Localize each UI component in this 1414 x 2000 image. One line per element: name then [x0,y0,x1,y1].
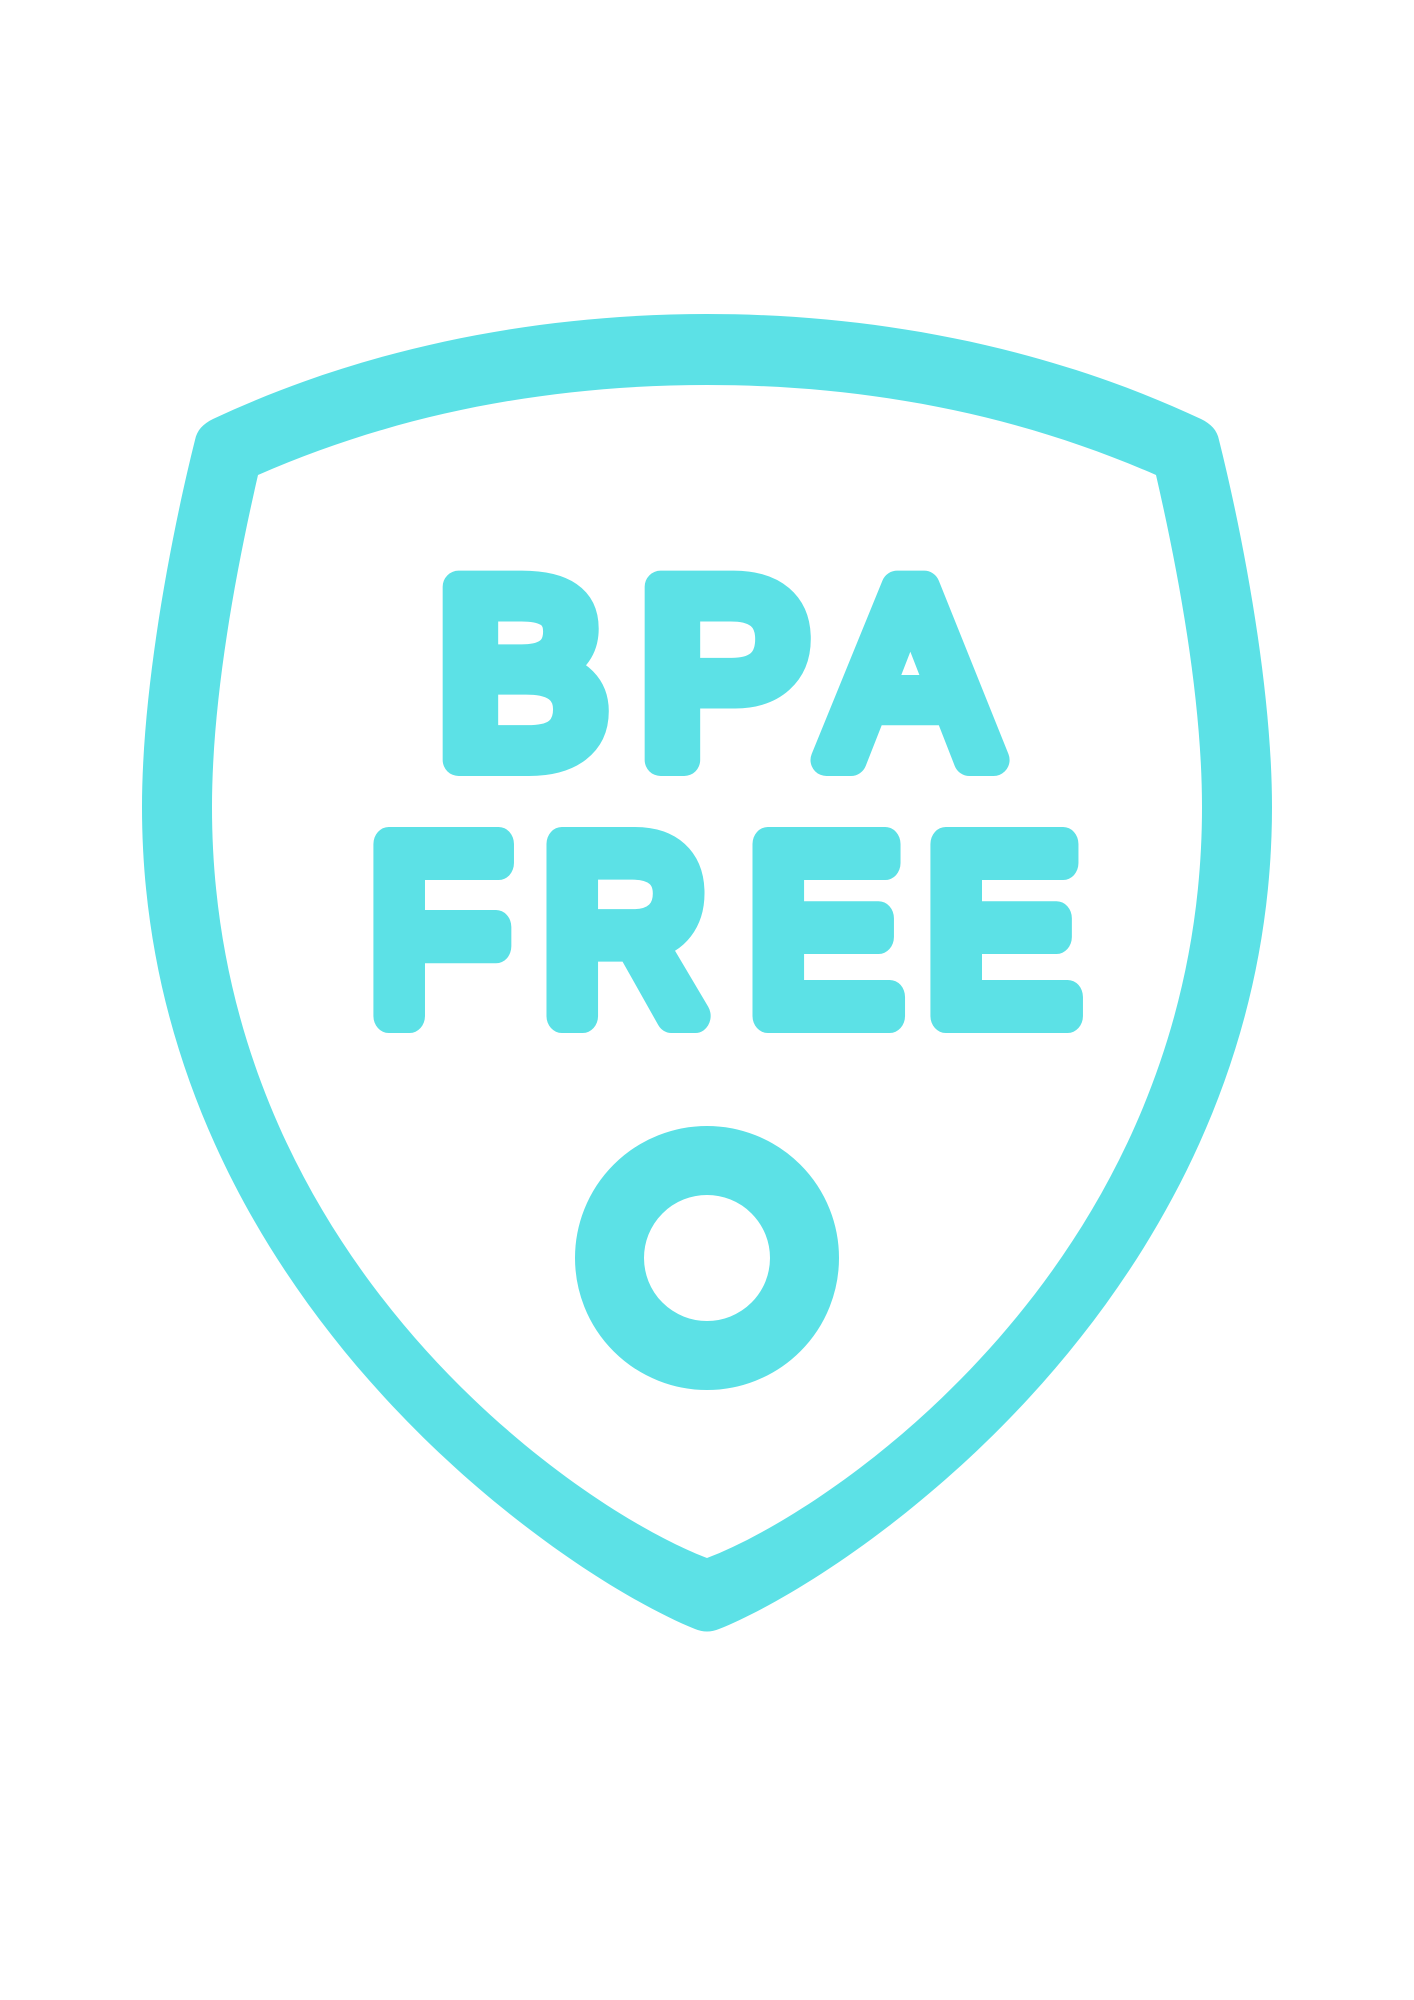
icon: BPA free shield badge [142,314,1272,1632]
heading: FREE: FREE [370,791,1077,1070]
heading: BPA: BPA [438,533,994,814]
icon: ring [610,1160,804,1356]
shield outline [142,314,1272,1632]
